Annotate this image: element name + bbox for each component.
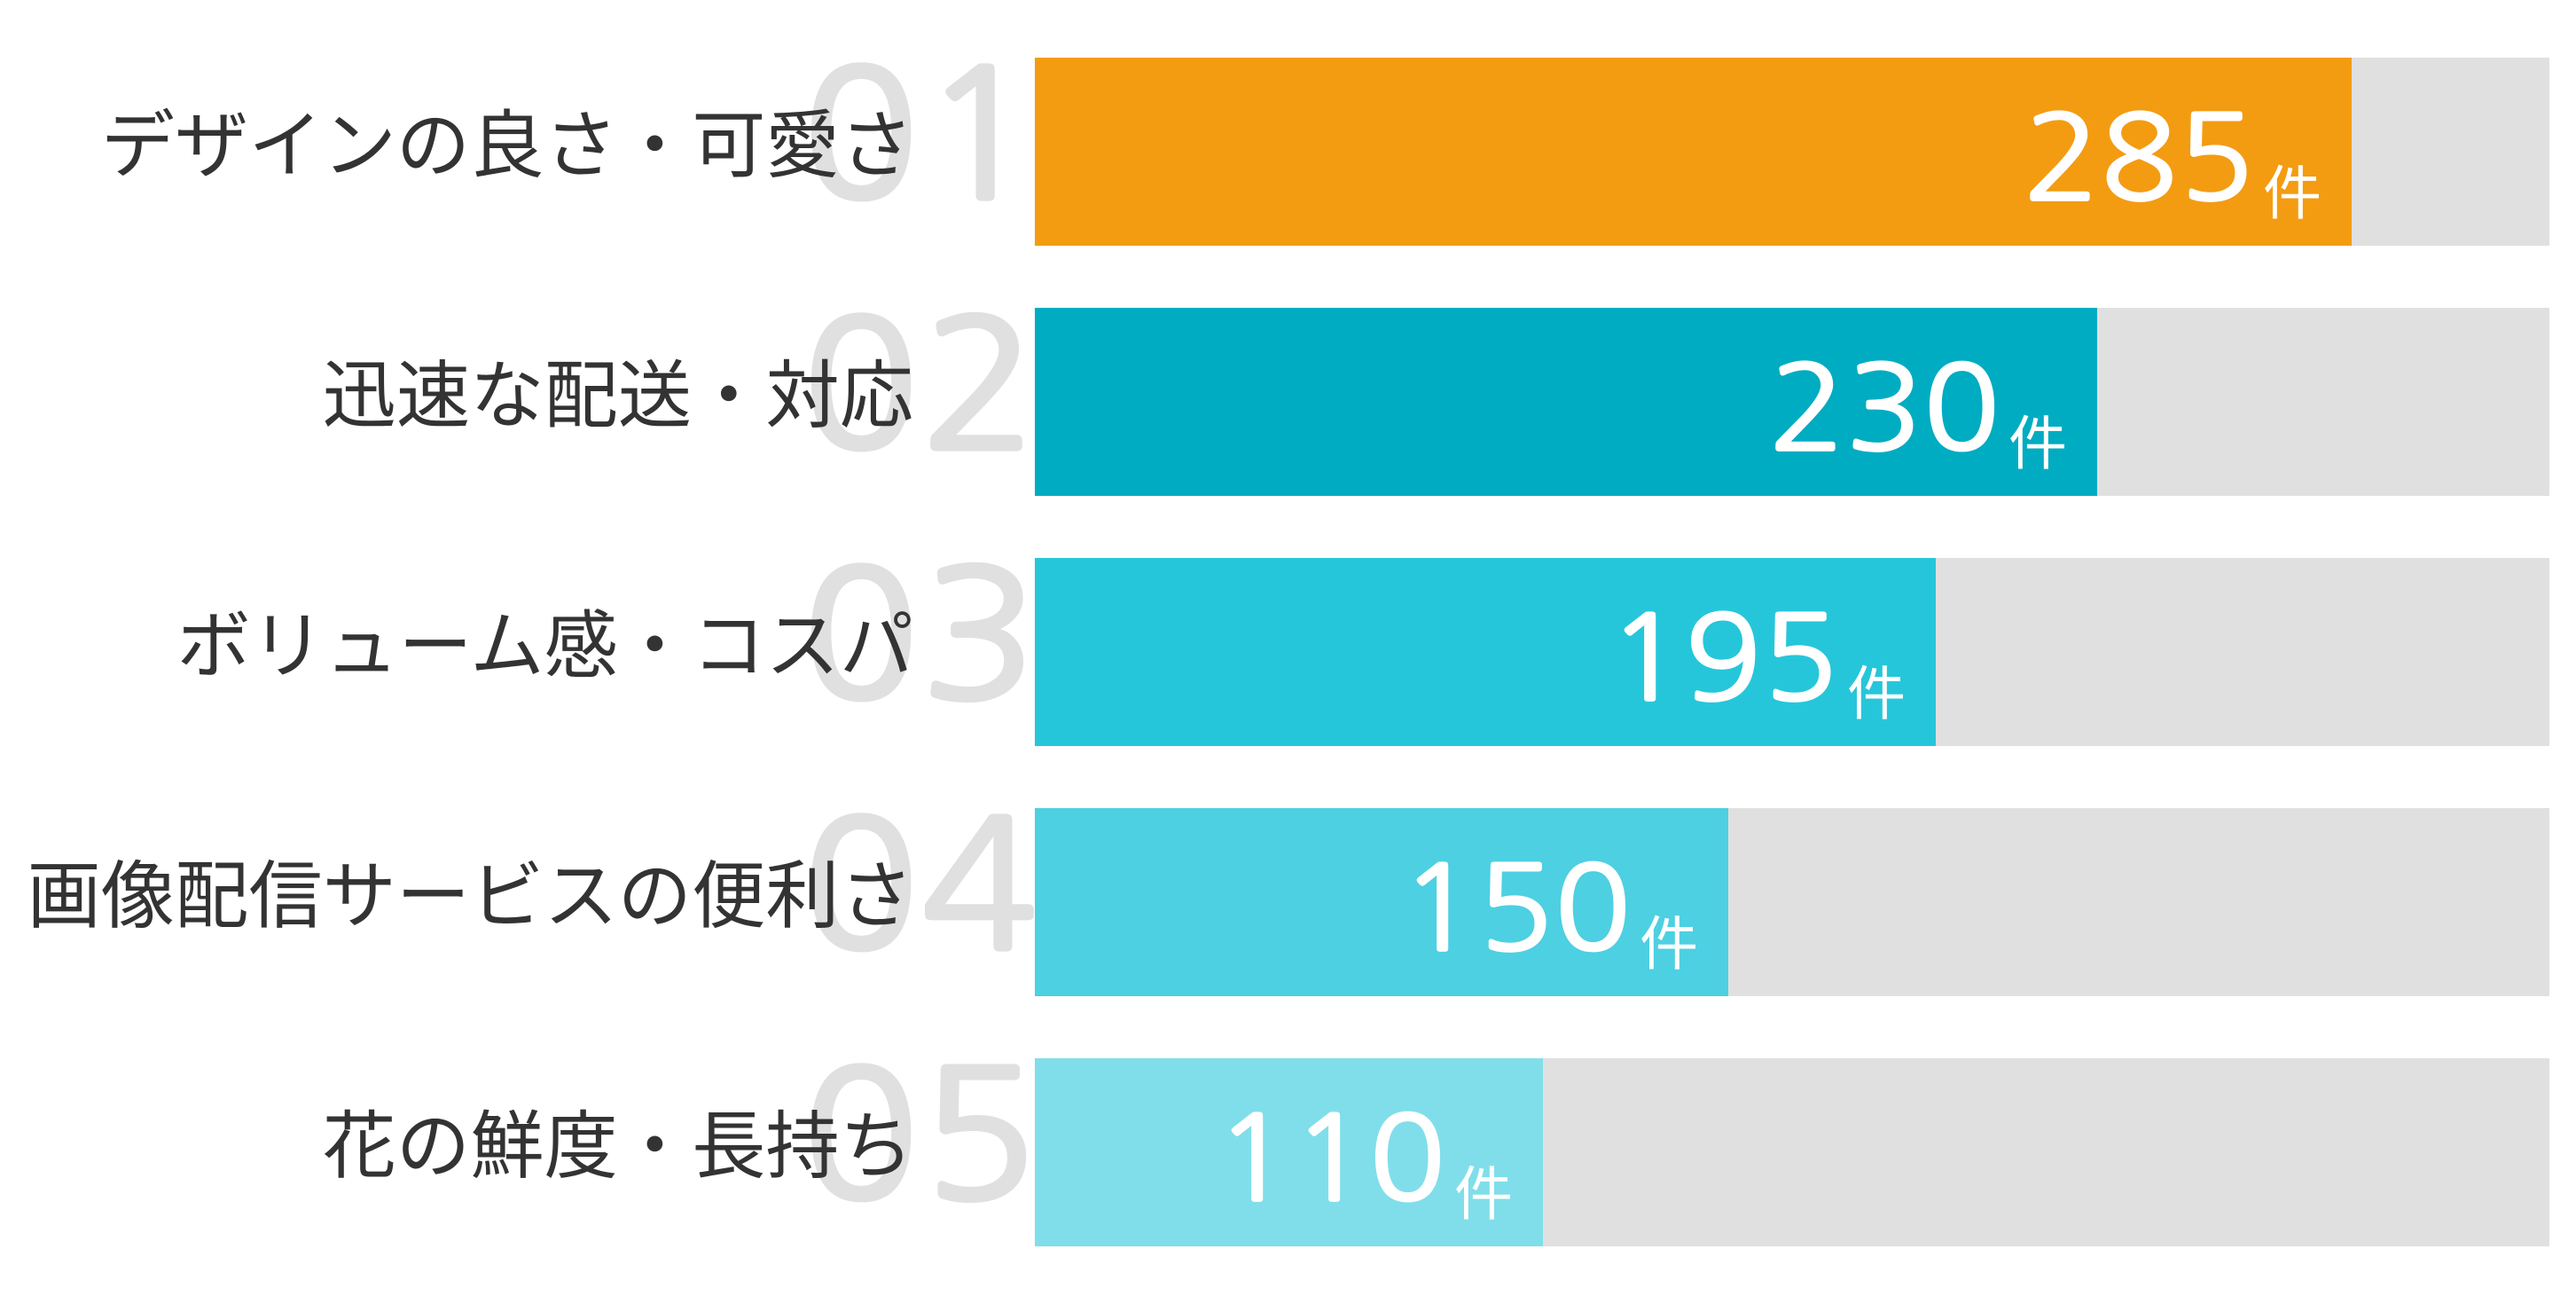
- row 2: 迅速な配送・対応: [323, 296, 2549, 496]
- row 4: 画像配信サービスの便利さ: [27, 797, 2549, 996]
- row 5: 花の鮮度・長持ち: [323, 1047, 2549, 1246]
- rank number 01: 01: [803, 46, 1037, 224]
- unit 4: 件: [1640, 897, 1698, 982]
- bar track 2: [1035, 308, 2549, 496]
- bar track 1: [1035, 58, 2549, 246]
- bar value 285: [1035, 58, 2352, 246]
- value 150: 150: [1400, 850, 1631, 967]
- label 3: ボリューム感・コスパ: [177, 585, 913, 693]
- unit 1: 件: [2263, 146, 2322, 232]
- value 195: 195: [1608, 600, 1838, 717]
- rank number 03: 03: [803, 546, 1037, 724]
- value 230: 230: [1769, 350, 2000, 467]
- bar track 4: [1035, 808, 2549, 996]
- rank number 04: 04: [803, 797, 1037, 974]
- value 110: 110: [1215, 1100, 1445, 1217]
- value 285: 285: [2024, 99, 2254, 216]
- bar value 150: [1035, 808, 1728, 996]
- unit 2: 件: [2008, 397, 2067, 482]
- bar track 3: [1035, 558, 2549, 746]
- label 2: 迅速な配送・対応: [323, 335, 913, 443]
- row 1: デザインの良さ・可愛さ: [101, 46, 2549, 246]
- row 3: ボリューム感・コスパ: [177, 546, 2549, 746]
- rank number 02: 02: [803, 296, 1037, 474]
- label 1: デザインの良さ・可愛さ: [101, 85, 913, 192]
- unit 3: 件: [1847, 647, 1906, 732]
- bar value 195: [1035, 558, 1936, 746]
- rank number 05: 05: [803, 1047, 1037, 1224]
- label 4: 画像配信サービスの便利さ: [27, 836, 913, 943]
- unit 5: 件: [1454, 1147, 1513, 1232]
- bar track 5: [1035, 1058, 2549, 1246]
- bar value 230: [1035, 308, 2097, 496]
- bar value 110: [1035, 1058, 1543, 1246]
- label 5: 花の鮮度・長持ち: [323, 1086, 913, 1193]
